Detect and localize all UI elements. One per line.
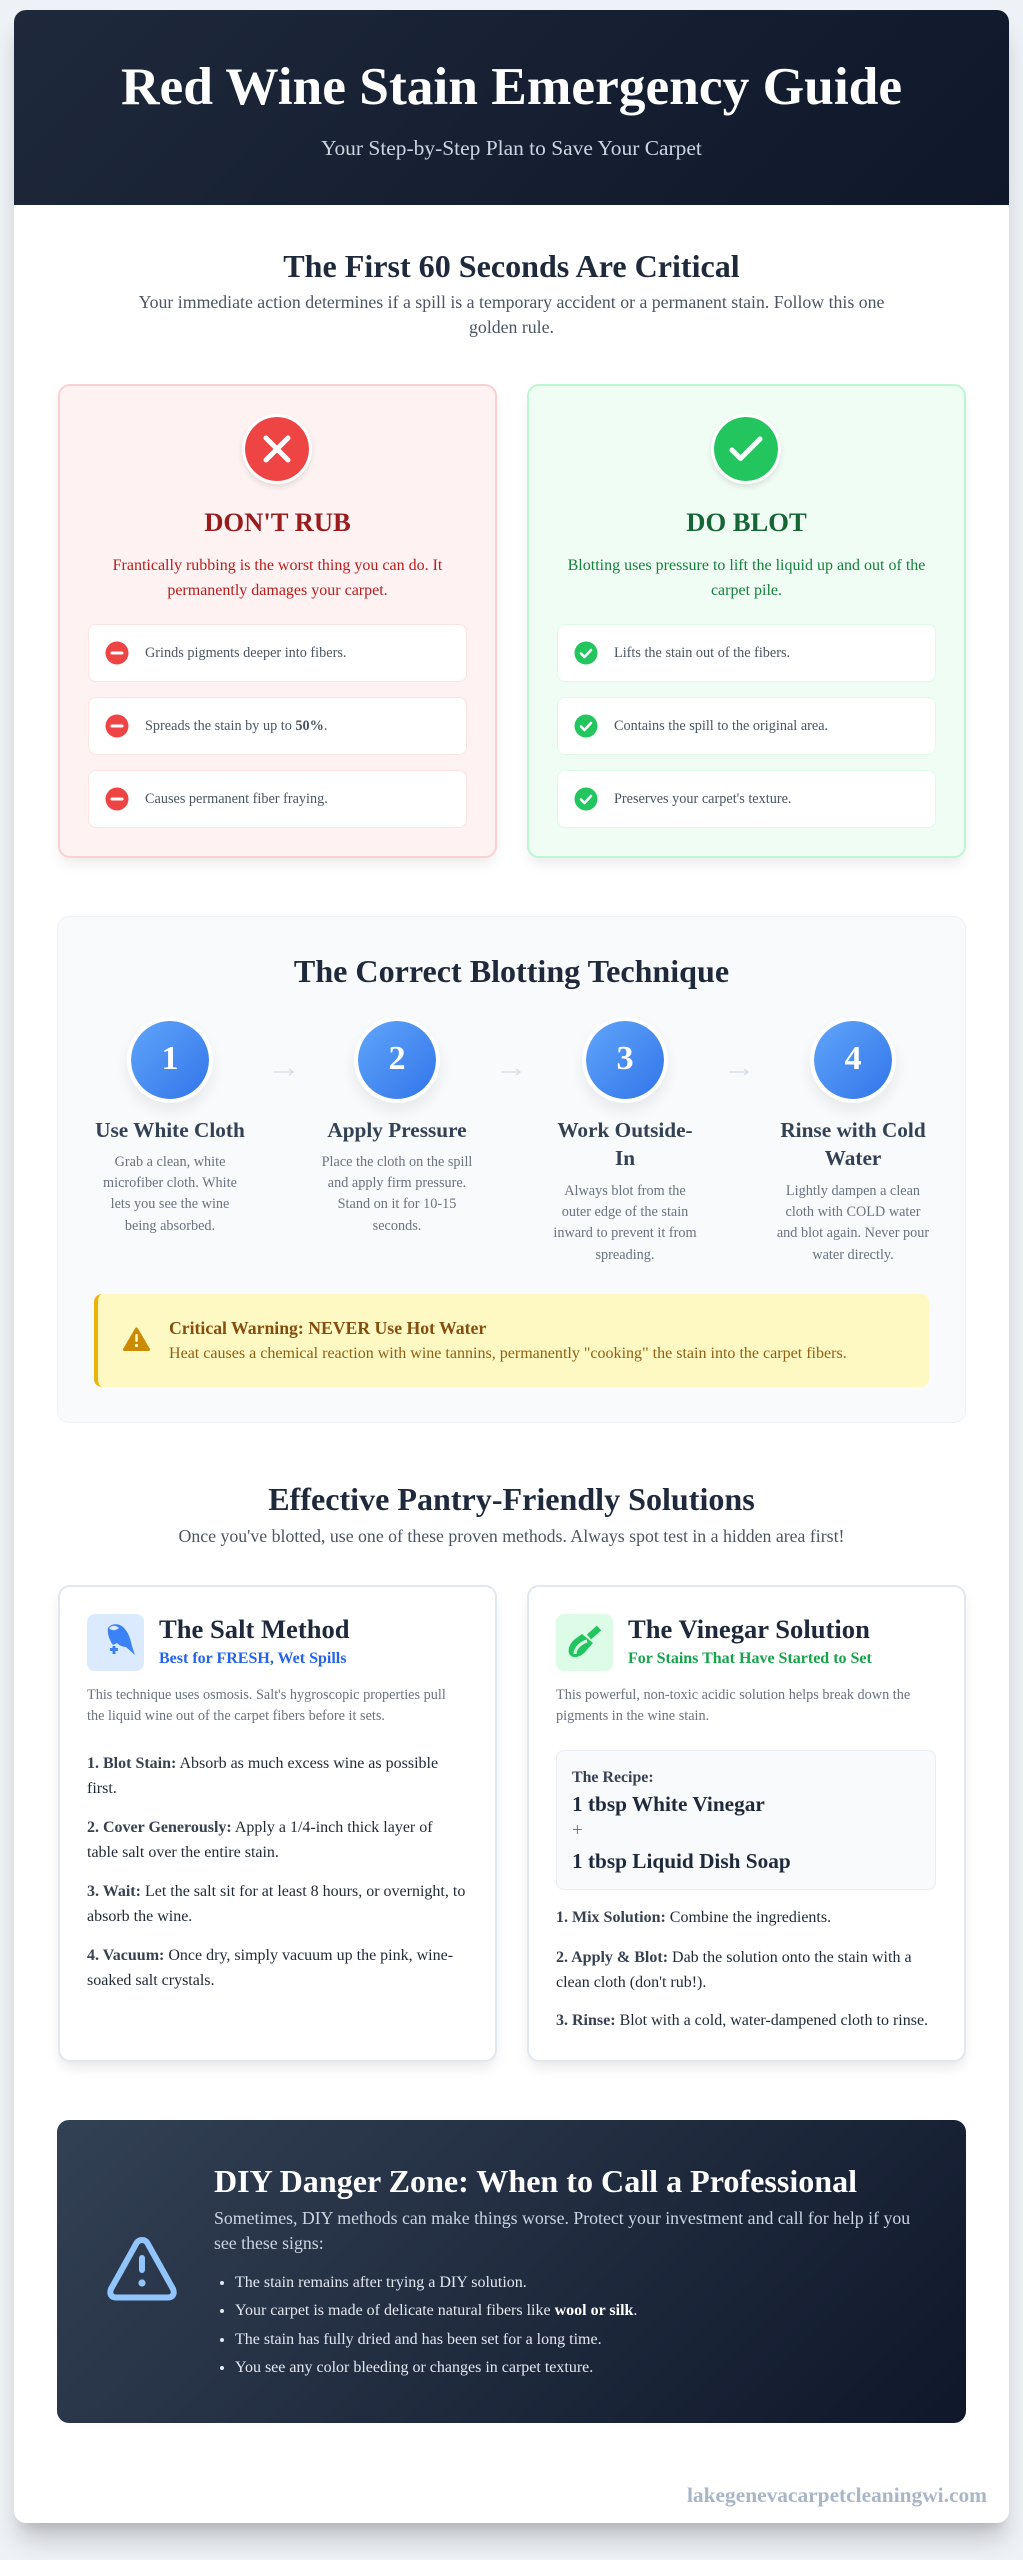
plus sign: +: [572, 1820, 583, 1841]
step: cover generously: 2. Cover Generously: Apply a 1/4-inch thick layer of: [87, 1819, 433, 1836]
section heading: solutions: [179, 1480, 844, 1546]
panel: don't rub: [58, 384, 497, 858]
heading: do blot: DO BLOT: [686, 506, 807, 536]
step: mix: 1. Mix Solution: Combine the ingredients.: [556, 1909, 831, 1926]
step 3 title: [557, 1118, 693, 1170]
method description: the liquid wine out of the carpet fibers before it sets.: [87, 1708, 385, 1724]
description: carpet pile.: [711, 582, 782, 599]
step: apply and blot: 2. Apply & Blot: Dab the solution onto the stain with a: [556, 1948, 912, 1966]
heading: The First 60 Seconds Are Critical: [283, 248, 740, 284]
header banner: [14, 10, 1009, 205]
method description: pigments in the wine stain.: [556, 1708, 709, 1724]
list item: lifts stain: Lifts the stain out of the fibers.: [614, 644, 790, 660]
step 1: [95, 1021, 245, 1234]
step number 1: [127, 1017, 213, 1103]
subtitle: Your Step-by-Step Plan to Save Your Carpet: [321, 136, 702, 160]
step: wait: [87, 1883, 465, 1925]
step: wait: absorb the wine.: [87, 1908, 192, 1925]
description: [113, 557, 442, 599]
step 3 description: spreading.: [596, 1247, 654, 1263]
list item: grinds pigments: Grinds pigments deeper into fibers.: [145, 644, 346, 660]
heading: The Correct Blotting Technique: [294, 953, 729, 989]
step 3 description: inward to prevent it from: [553, 1225, 697, 1241]
step 2 description: and apply firm pressure.: [328, 1175, 466, 1191]
method description: This powerful, non-toxic acidic solution helps break down the: [556, 1687, 910, 1703]
intro text: [138, 292, 884, 337]
step 1 description: microfiber cloth. White: [103, 1175, 237, 1191]
method subtitle: For Stains That Have Started to Set: [628, 1650, 872, 1667]
danger zone intro: [214, 2208, 910, 2253]
step 4 description: Lightly dampen a clean: [786, 1182, 920, 1198]
warning signs list: You see any color bleeding or changes in carpet texture.: [235, 2359, 593, 2376]
step: vacuum: soaked salt crystals.: [87, 1972, 215, 1989]
description: Frantically rubbing is the worst thing you can do. It: [113, 557, 442, 574]
method description: This technique uses osmosis. Salt's hygroscopic properties pull: [87, 1687, 446, 1703]
arrow 2: [501, 1068, 521, 1076]
step 4 title: Water: [825, 1146, 881, 1170]
warning signs list: The stain has fully dried and has been set for a long time.: [235, 2331, 602, 2348]
recipe box: [556, 1750, 936, 1890]
icon: red cross: [242, 414, 312, 484]
step 1 description: [103, 1154, 237, 1234]
step 4 description: [777, 1182, 929, 1263]
step 4 description: cloth with COLD water: [786, 1204, 920, 1220]
list item: lifts stain: [557, 624, 936, 682]
step 2 description: [322, 1154, 472, 1234]
step 4 title: Rinse with Cold: [780, 1118, 926, 1142]
step: rinse: 3. Rinse: Blot with a cold, water-dampened cloth to rinse.: [556, 2012, 928, 2029]
description: [568, 557, 925, 599]
icon: salt shaker: [87, 1614, 144, 1671]
step 3: [553, 1021, 697, 1263]
step: blot stain: [87, 1754, 438, 1796]
method description: [556, 1687, 910, 1724]
step: vacuum: 4. Vacuum: Once dry, simply vacuum up the pink, wine-: [87, 1947, 453, 1964]
callout: hot water warning: [94, 1294, 929, 1387]
intro text: Once you've blotted, use one of these proven methods. Always spot test in a hidden area first!: [179, 1526, 844, 1546]
warning signs list: Your carpet is made of delicate natural fibers like wool or silk.: [235, 2302, 637, 2319]
method subtitle: Best for FRESH, Wet Spills: [159, 1650, 346, 1667]
icon: warning outline: [107, 2237, 177, 2300]
step 3 description: [553, 1182, 697, 1263]
step number 2: 2: [388, 1040, 406, 1077]
step 3 description: outer edge of the stain: [562, 1204, 688, 1220]
list item: spreads stain: Spreads the stain by up to 50%.: [145, 718, 327, 734]
step 4: [777, 1021, 929, 1263]
step number 2: [354, 1017, 440, 1103]
method title: The Salt Method: [159, 1614, 350, 1644]
recipe label: The Recipe:: [572, 1769, 654, 1786]
step 2 description: seconds.: [373, 1218, 421, 1234]
description: permanently damages your carpet.: [167, 582, 388, 599]
list item: fiber fraying: Causes permanent fiber fraying.: [145, 790, 328, 806]
panel: salt method: [58, 1585, 497, 2062]
step number 3: [582, 1017, 668, 1103]
step 2 description: Stand on it for 10-15: [338, 1196, 456, 1212]
method description: [87, 1687, 446, 1724]
step: vacuum: [87, 1947, 453, 1989]
title: Red Wine Stain Emergency Guide: [121, 56, 902, 116]
step 4 description: and blot again. Never pour: [777, 1225, 929, 1241]
step number 1: 1: [161, 1040, 179, 1077]
method title: The Vinegar Solution: [628, 1614, 870, 1644]
step number 3: 3: [616, 1040, 634, 1077]
icon: vinegar brush: [556, 1614, 613, 1671]
step 2 description: Place the cloth on the spill: [322, 1154, 472, 1170]
step 3 description: Always blot from the: [564, 1182, 686, 1198]
ingredient: dish soap: 1 tbsp Liquid Dish Soap: [572, 1849, 791, 1873]
step 1 title: Use White Cloth: [95, 1118, 245, 1142]
heading: Effective Pantry-Friendly Solutions: [268, 1480, 755, 1516]
description: Blotting uses pressure to lift the liquid up and out of the: [568, 557, 925, 574]
list item: spreads stain: [88, 697, 467, 755]
list item: preserves texture: [557, 770, 936, 828]
footer website: lakegenevacarpetcleaningwi.com: [687, 2483, 987, 2507]
step: blot stain: 1. Blot Stain: Absorb as much excess wine as possible: [87, 1754, 438, 1772]
step: wait: 3. Wait: Let the salt sit for at least 8 hours, or overnight, to: [87, 1883, 465, 1900]
step 1 description: Grab a clean, white: [115, 1154, 225, 1170]
panel: blotting technique: [57, 916, 966, 1423]
ingredient: vinegar: 1 tbsp White Vinegar: [572, 1792, 765, 1816]
list item: preserves texture: Preserves your carpet's texture.: [614, 790, 791, 806]
danger zone intro: see these signs:: [214, 2233, 324, 2253]
icon: green check: [711, 414, 781, 484]
intro text: golden rule.: [469, 317, 554, 337]
icon: warning triangle: [123, 1327, 150, 1351]
list item: contains spill: [557, 697, 936, 755]
list item: fiber fraying: [88, 770, 467, 828]
arrow 3: [729, 1068, 749, 1076]
step 2: [322, 1021, 472, 1234]
step: apply and blot: clean cloth (don't rub!).: [556, 1974, 706, 1990]
panel: do blot: [527, 384, 966, 858]
warning title: Critical Warning: NEVER Use Hot Water: [169, 1318, 486, 1338]
step 3 title: Work Outside-: [557, 1118, 693, 1142]
panel: vinegar solution: [527, 1585, 966, 2062]
list item: contains spill: Contains the spill to the original area.: [614, 718, 828, 734]
step: cover generously: table salt over the entire stain.: [87, 1844, 279, 1861]
step 4 description: water directly.: [812, 1247, 894, 1263]
warning signs list: [220, 2274, 637, 2376]
step 2 title: Apply Pressure: [327, 1118, 467, 1142]
danger zone intro: Sometimes, DIY methods can make things worse. Protect your investment and call for help if you: [214, 2208, 910, 2228]
heading: don't rub: DON'T RUB: [204, 506, 351, 536]
section heading: first 60 seconds: [138, 248, 884, 337]
step 4 title: [780, 1118, 926, 1170]
arrow 1: [274, 1068, 294, 1076]
list item: grinds pigments: [88, 624, 467, 682]
step: apply and blot: [556, 1948, 912, 1990]
panel: DIY danger zone: [57, 2120, 966, 2423]
step 1 description: being absorbed.: [125, 1218, 215, 1234]
warning text: Heat causes a chemical reaction with wine tannins, permanently "cooking" the stain into the carpet fibers.: [169, 1345, 847, 1362]
warning signs list: The stain remains after trying a DIY solution.: [235, 2274, 527, 2291]
step 3 title: In: [615, 1146, 635, 1170]
step: cover generously: [87, 1819, 433, 1861]
step: blot stain: first.: [87, 1780, 117, 1796]
step number 4: [810, 1017, 896, 1103]
step 1 description: lets you see the wine: [111, 1196, 229, 1212]
danger zone heading: DIY Danger Zone: When to Call a Professional: [214, 2163, 857, 2199]
intro text: Your immediate action determines if a spill is a temporary accident or a permanent stain. Follow this one: [139, 292, 884, 312]
step number 4: 4: [844, 1040, 862, 1077]
